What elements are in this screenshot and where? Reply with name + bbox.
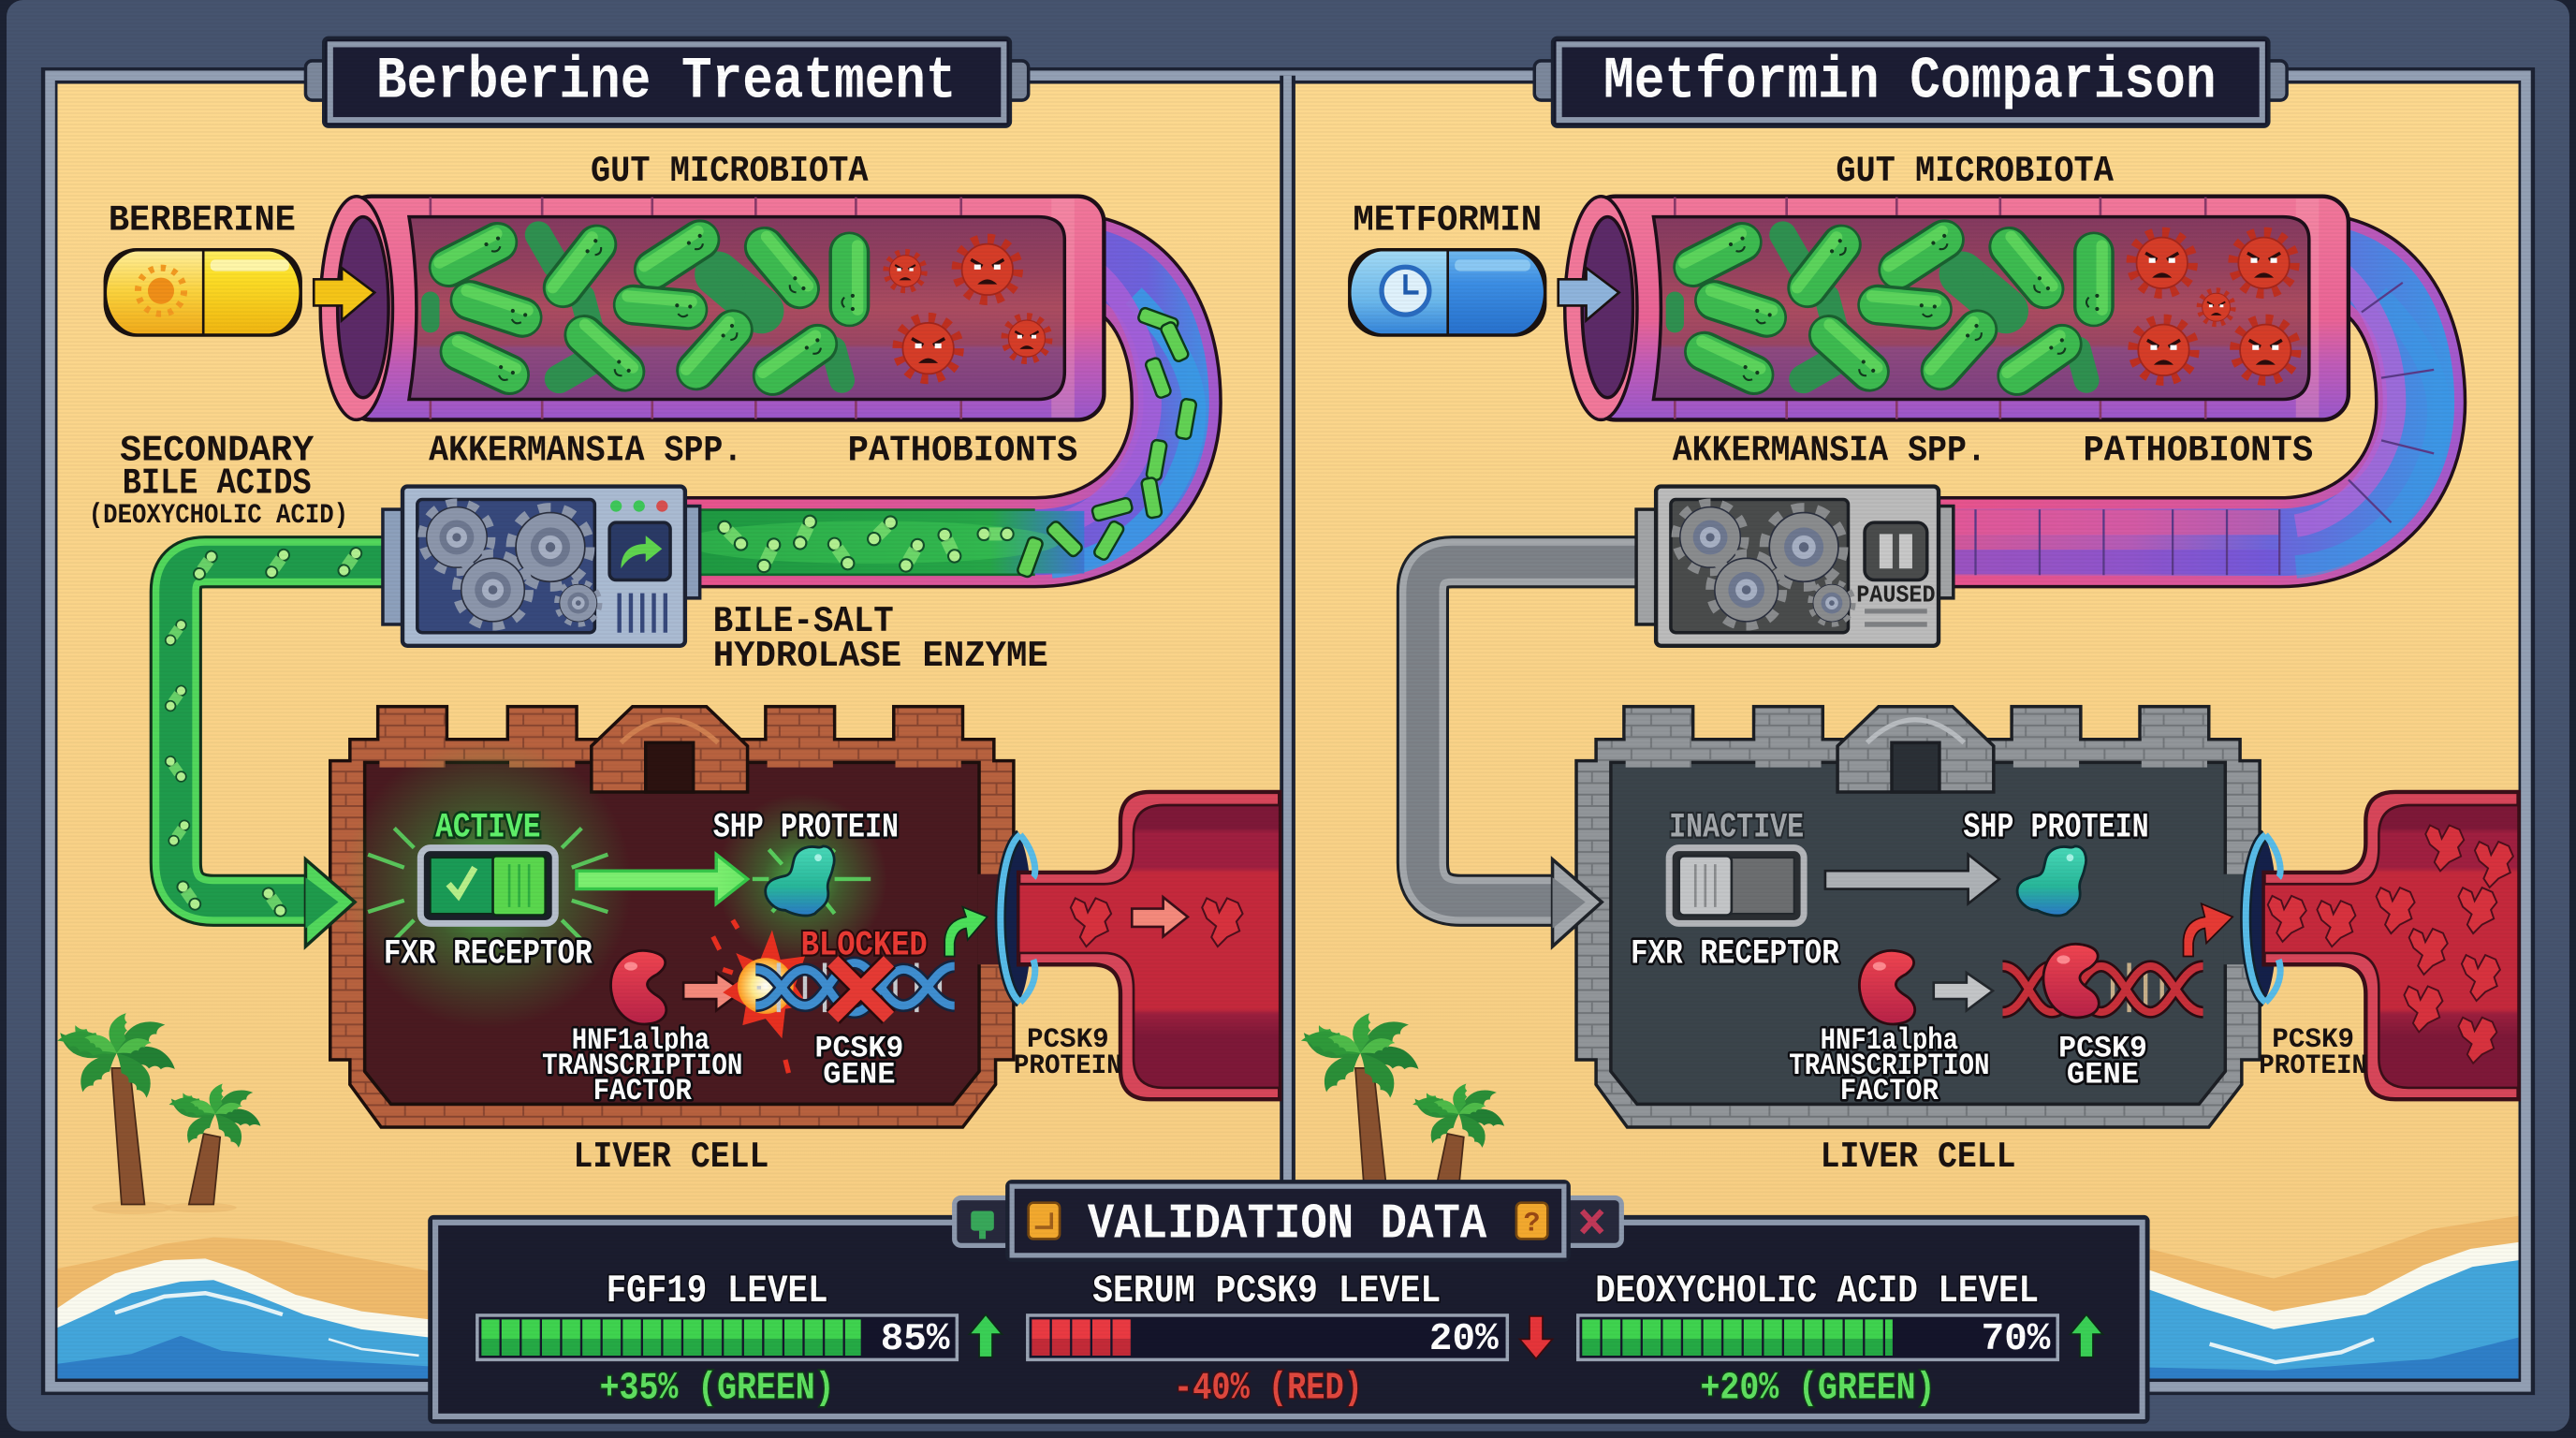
title plate: berberine treatment: Berberine Treatment	[376, 48, 956, 115]
bile-salt hydrolase enzyme machine	[383, 487, 700, 646]
liver cell	[330, 707, 1017, 1127]
label: hnf1alpha transcription factor	[1789, 1023, 1989, 1108]
icon: fxr switch off	[1669, 848, 1804, 923]
label: pcsk9 gene: GENE	[823, 1058, 896, 1093]
icon: metformin capsule	[1348, 248, 1546, 337]
validation title plate	[955, 1181, 1621, 1260]
panel: validation data	[431, 1181, 2147, 1421]
portal opening	[2244, 835, 2277, 1003]
label: pcsk9 protein: PROTEIN	[1014, 1049, 1122, 1081]
icon: question block: ?	[1524, 1208, 1541, 1240]
akkermansia bacteria	[1666, 212, 2115, 404]
icon: fxr switch rays	[368, 829, 607, 940]
label: gut microbiota: GUT MICROBIOTA	[1836, 151, 2115, 192]
metric: fgf19 level: +35% (GREEN)	[600, 1368, 835, 1411]
label: pcsk9 gene	[815, 1032, 903, 1093]
arrow: pcsk9 small green	[944, 907, 988, 956]
blood vessel with pcsk9 protein	[1018, 792, 1280, 1099]
icon: shp protein	[753, 846, 871, 916]
label: pcsk9 gene	[2058, 1032, 2147, 1093]
label: secondary bile acids: BILE ACIDS	[123, 463, 312, 505]
label: berberine: BERBERINE	[109, 200, 296, 242]
title plate: metformin comparison	[1534, 37, 2287, 126]
validation body	[431, 1218, 2147, 1421]
label: gut microbiota: GUT MICROBIOTA	[591, 151, 869, 192]
label: hnf1alpha transcription factor: HNF1alpha	[1821, 1023, 1958, 1058]
label: hnf1alpha transcription factor: HNF1alpha	[572, 1023, 710, 1058]
portal opening	[999, 835, 1032, 1003]
label: secondary bile acids: (DEOXYCHOLIC ACID)	[89, 499, 348, 531]
label: shp protein: SHP PROTEIN	[713, 808, 899, 847]
palm trees left	[53, 1010, 265, 1214]
validation title plate: VALIDATION DATA	[1088, 1196, 1487, 1253]
label: pcsk9 protein: PCSK9	[2272, 1023, 2354, 1055]
pathobionts	[887, 241, 1047, 377]
icon: close x	[1582, 1211, 1602, 1232]
label: akkermansia: AKKERMANSIA SPP.	[429, 430, 742, 471]
label: pathobionts: PATHOBIONTS	[848, 430, 1077, 471]
label: bile-salt hydrolase enzyme	[713, 601, 1048, 677]
icon: berberine capsule	[104, 248, 302, 337]
label: akkermansia: AKKERMANSIA SPP.	[1673, 430, 1986, 471]
metric: serum pcsk9 level: 20%	[1429, 1318, 1499, 1361]
arrow: inactive to shp	[1825, 855, 1999, 903]
label: pcsk9 protein	[1014, 1023, 1122, 1081]
label: pcsk9 protein: PCSK9	[1027, 1023, 1109, 1055]
metric: serum pcsk9 level	[1028, 1269, 1553, 1411]
panel: metformin comparison	[1348, 37, 2519, 1178]
glow: shp protein	[716, 794, 887, 964]
label: inactive: INACTIVE	[1669, 808, 1804, 847]
label: pathobionts: PATHOBIONTS	[2083, 430, 2313, 471]
arrow: hnf to gene	[683, 973, 742, 1010]
metric: fgf19 level: FGF19 LEVEL	[607, 1269, 828, 1313]
title plate: berberine treatment	[305, 37, 1029, 126]
icon: dna active	[2002, 944, 2203, 1018]
portal ring highlight	[2246, 835, 2280, 1003]
arrow: hnf to gene	[1934, 973, 1993, 1010]
glow: fxr	[344, 740, 633, 1029]
icon: fxr switch on	[420, 848, 555, 923]
akkermansia bacteria	[421, 212, 870, 404]
portal ring	[2246, 835, 2265, 1003]
metric: fgf19 level: 85%	[881, 1318, 950, 1361]
label: pcsk9 protein: PROTEIN	[2259, 1049, 2367, 1081]
icon: dna with x	[755, 961, 955, 1017]
label: fxr receptor: FXR RECEPTOR	[384, 934, 593, 974]
label: metformin: METFORMIN	[1353, 200, 1542, 242]
metric: deoxycholic acid level: DEOXYCHOLIC ACID LEVEL	[1595, 1269, 2039, 1313]
arrow: pcsk9 small red	[2184, 903, 2232, 956]
title plate: metformin comparison: Metformin Comparison	[1603, 48, 2217, 115]
panel: berberine treatment	[89, 37, 1280, 1178]
icon: explosion	[713, 920, 809, 1073]
label: hnf1alpha transcription factor: FACTOR	[593, 1074, 692, 1108]
paused enzyme machine	[1636, 487, 1954, 646]
label: hnf1alpha transcription factor: TRANSCRIPTION	[542, 1049, 742, 1083]
metric: serum pcsk9 level: SERUM PCSK9 LEVEL	[1092, 1269, 1441, 1313]
icon: yellow block	[1029, 1203, 1060, 1239]
bile acids in pipe	[718, 307, 1197, 578]
intestine pipe	[1931, 259, 2438, 575]
icon: hnf1alpha	[1859, 950, 1915, 1024]
label: active: ACTIVE	[435, 808, 540, 847]
intestine tube	[1565, 197, 2349, 419]
metric: deoxycholic acid level	[1578, 1269, 2103, 1411]
metric: serum pcsk9 level: -40% (RED)	[1174, 1368, 1363, 1411]
beach right	[2136, 1216, 2519, 1380]
label: hnf1alpha transcription factor: TRANSCRIPTION	[1789, 1049, 1989, 1083]
portal ring highlight	[1001, 835, 1035, 1003]
label: blocked: BLOCKED	[801, 927, 928, 966]
intestine pipe	[681, 259, 1194, 567]
label: pcsk9 protein	[2259, 1023, 2367, 1081]
arrow: into gut	[1559, 268, 1619, 320]
label: pcsk9 gene: PCSK9	[2058, 1032, 2147, 1066]
label: secondary bile acids: SECONDARY	[120, 430, 315, 471]
arrow: active to shp	[577, 855, 748, 903]
label: secondary bile acids	[89, 430, 348, 531]
pathobionts	[2133, 234, 2294, 379]
intestine tube	[320, 197, 1104, 419]
metric: deoxycholic acid level: +20% (GREEN)	[1701, 1368, 1936, 1411]
gray inactive pipe with arrow	[1423, 562, 1641, 946]
label: hnf1alpha transcription factor	[542, 1023, 742, 1108]
portal ring	[1001, 835, 1020, 1003]
label: bile-salt hydrolase enzyme: HYDROLASE ENZYME	[713, 636, 1048, 677]
green bile acid pipe with arrow	[162, 547, 394, 946]
blood vessel with pcsk9 protein	[2264, 792, 2519, 1099]
metric: deoxycholic acid level: 70%	[1982, 1318, 2051, 1361]
label: bile-salt hydrolase enzyme: BILE-SALT	[713, 601, 894, 642]
icon: hnf1alpha	[611, 950, 666, 1024]
icon: question block	[1516, 1203, 1547, 1240]
liver cell	[1576, 707, 2263, 1127]
label: paused: PAUSED	[1856, 580, 1936, 609]
label: liver cell: LIVER CELL	[574, 1137, 768, 1178]
label: pcsk9 gene: GENE	[2067, 1058, 2139, 1093]
metric: fgf19 level	[477, 1269, 1003, 1411]
icon: shp protein	[2017, 846, 2086, 916]
label: pcsk9 gene: PCSK9	[815, 1032, 903, 1066]
icon: green bot	[971, 1211, 994, 1239]
beach left	[57, 1238, 444, 1380]
label: shp protein: SHP PROTEIN	[1963, 808, 2149, 847]
arrow: into gut	[314, 268, 374, 320]
palm trees right	[1297, 1010, 1508, 1204]
label: liver cell: LIVER CELL	[1821, 1137, 2016, 1178]
label: hnf1alpha transcription factor: FACTOR	[1840, 1074, 1939, 1108]
label: fxr receptor: FXR RECEPTOR	[1631, 934, 1840, 974]
